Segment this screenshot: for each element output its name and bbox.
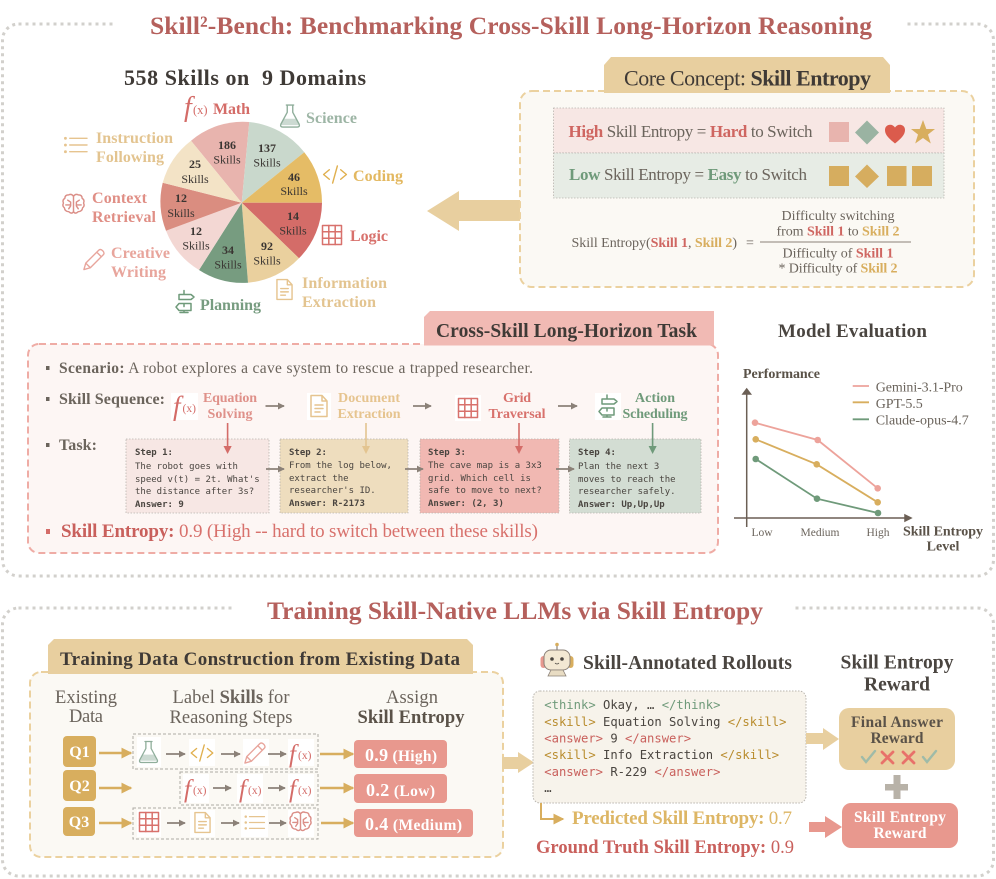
row: Q1 [63, 734, 447, 769]
heading: reward [840, 652, 954, 696]
x axis labels: High [866, 527, 890, 539]
pie chart: 12 [175, 191, 187, 205]
label: instruction following [64, 130, 173, 166]
step 2 [280, 439, 408, 513]
icon: plus [885, 775, 908, 799]
skill: equation solving: Equation [203, 391, 257, 406]
box: final answer reward: Final Answer [851, 714, 943, 731]
skill: action scheduling: Scheduling [622, 407, 688, 422]
legend: Claude-opus-4.7 [876, 414, 969, 428]
scenario: Scenario: A robot explores a cave system to rescue a trapped researcher. [59, 360, 533, 377]
column headings: Data [69, 707, 103, 727]
row: Q3: 0.4 (Medium) [365, 814, 462, 834]
arrow [413, 405, 431, 407]
heading: reward: Skill Entropy [840, 652, 954, 674]
label: instruction following: Following [96, 149, 164, 166]
arrow: rollout to final answer [806, 728, 839, 750]
row: low skill entropy [554, 153, 944, 198]
step 1: Answer: 9 [135, 500, 184, 510]
label: information extraction: Extraction [302, 294, 376, 311]
panel: cross-skill long-horizon task [28, 311, 718, 553]
formula: skill entropy: Difficulty of Skill 1 [782, 246, 894, 262]
legend: Gemini-3.1-Pro [876, 380, 963, 396]
pie chart: 46 [288, 170, 300, 184]
skill: document extraction: Extraction [338, 407, 401, 422]
arrow [558, 405, 577, 407]
box: final answer reward: Reward [870, 730, 924, 747]
step 3: The cave map is a 3x3 [428, 461, 542, 471]
panel: training section border [2, 598, 994, 876]
pie chart: 92 [261, 239, 273, 253]
label: math: Math [213, 101, 250, 118]
label: science: Science [306, 110, 357, 127]
column headings: Label Skills for [172, 688, 290, 708]
skill: action scheduling: Action [635, 391, 675, 406]
step 2: extract the [289, 474, 349, 484]
label: coding: Coding [353, 168, 403, 185]
column headings [55, 688, 465, 728]
label: math [184, 92, 250, 123]
heading: rollouts: Skill-Annotated Rollouts [583, 653, 792, 674]
tab: core concept [604, 57, 890, 93]
formula: skill entropy: * Difficulty of Skill 2 [778, 262, 898, 276]
column headings: Existing [55, 688, 117, 708]
heading: model evaluation: Model Evaluation [778, 321, 927, 342]
label: instruction following: Instruction [96, 130, 173, 147]
arrow: entropy to reward [809, 816, 842, 838]
label: planning: Planning [200, 297, 261, 314]
code block: rollout: … [544, 781, 552, 795]
skill: grid traversal: Grid [503, 391, 531, 406]
step 2: researcher's ID. [289, 486, 376, 496]
label: science [281, 105, 357, 127]
row: Q1: (x) [298, 750, 312, 762]
label: coding [324, 166, 403, 185]
y axis label: Performance [743, 367, 820, 382]
step 2: Step 2: [289, 448, 327, 458]
label: math: (x) [193, 103, 208, 117]
step 4: Step 4: [578, 448, 616, 458]
step 3: grid. Which cell is [428, 474, 531, 484]
row: high skill entropy [554, 108, 944, 153]
step 1: the distance after 3s? [135, 487, 254, 497]
skill entropy score: Skill Entropy: 0.9 (High -- hard to switch between these skills) [61, 521, 538, 542]
legend [853, 380, 969, 428]
tab: training data construction [48, 639, 473, 674]
pie chart: 186 [218, 138, 236, 152]
column headings: Assign [386, 688, 438, 708]
row: Q2: Q2 [69, 778, 90, 795]
ground truth skill entropy: Ground Truth Skill Entropy: 0.9 [536, 838, 794, 858]
row: Q1: 0.9 (High) [365, 745, 437, 765]
step 4: researcher safely. [578, 487, 676, 497]
row: Q2: f [239, 776, 249, 803]
code block: rollout [533, 691, 806, 803]
row: Q2: f [289, 776, 299, 803]
x axis title: Skill Entropy [903, 524, 983, 540]
step 3: Step 3: [428, 448, 466, 458]
skill: document extraction: Document [338, 391, 400, 406]
arrow: concept to skills [427, 191, 522, 231]
step 1: speed v(t) = 2t. What's [135, 475, 260, 485]
formula: skill entropy: Difficulty switching [782, 209, 894, 224]
title: training: Training Skill-Native LLMs via Skill Entropy [267, 596, 763, 625]
label: planning [176, 290, 261, 314]
step 3: safe to move to next? [428, 486, 542, 496]
tab: core concept: Core Concept: Skill Entropy [624, 66, 871, 90]
tab: cross-skill task [424, 311, 714, 346]
formula: skill entropy [572, 209, 911, 276]
row: Q1: f [289, 741, 299, 768]
task label: Task: [59, 437, 97, 454]
title: benchmark: Skill²-Bench: Benchmarking Cross-Skill Long-Horizon Reasoning [150, 11, 872, 40]
step 3 [420, 439, 559, 513]
step 2: From the log below, [289, 461, 392, 471]
row: Q2: (x) [248, 785, 262, 797]
step 1: The robot goes with [135, 462, 238, 472]
label: creative writing [84, 245, 170, 281]
box: final answer reward [839, 708, 955, 770]
label: creative writing: Writing [111, 264, 166, 281]
skill sequence [46, 391, 688, 422]
code block: rollout: <skill> Equation Solving </skill> [544, 715, 786, 729]
tab: cross-skill task: Cross-Skill Long-Horizon Task [436, 321, 697, 342]
x axis labels [751, 527, 890, 539]
panel: core concept skill entropy [520, 57, 974, 287]
row: Q2: (x) [193, 785, 207, 797]
code block: rollout: <think> Okay, … </think> [544, 698, 720, 712]
pie chart: Skills [182, 238, 210, 252]
code block: rollout: <skill> Info Extraction </skill> [544, 748, 779, 762]
pie chart: 14 [287, 209, 299, 223]
row: Q2: 0.2 (Low) [366, 780, 435, 800]
skill: equation solving [171, 391, 257, 422]
line series: claude [752, 456, 881, 516]
pie chart: 12 [190, 224, 202, 238]
arrows: skills to steps [224, 423, 657, 454]
row: low skill entropy: Low Skill Entropy = Easy to Switch [569, 165, 808, 184]
skill: grid traversal [455, 391, 546, 422]
pie chart: 137 [258, 141, 276, 155]
pie chart: Skills [253, 254, 281, 268]
panel: 558 skills on 9 domains [63, 65, 403, 314]
panel: skill entropy reward [806, 652, 958, 848]
column headings: Skill Entropy [358, 708, 465, 728]
row: Q1: Q1 [69, 744, 90, 761]
row: Q2: (x) [298, 785, 312, 797]
tab: training data construction: Training Data Construction from Existing Data [60, 649, 460, 670]
formula: skill entropy: from Skill 1 to Skill 2 [776, 224, 900, 240]
panel: training data construction [30, 639, 503, 857]
x axis labels: Medium [801, 527, 840, 539]
label: math: f [184, 92, 195, 123]
icon: robot [540, 643, 574, 676]
legend: GPT-5.5 [876, 397, 923, 412]
panel: benchmark section border [2, 14, 994, 576]
label: context retrieval [63, 190, 157, 226]
pie chart: 34 [222, 243, 234, 257]
pie chart: 25 [189, 157, 201, 171]
skill: grid traversal: Traversal [488, 407, 546, 422]
row: high skill entropy: High Skill Entropy = Hard to Switch [568, 122, 813, 141]
line series: gpt [752, 436, 881, 506]
pie chart: Skills [279, 224, 307, 238]
x axis title: Level [927, 540, 959, 554]
box: skill entropy reward: Reward [874, 825, 927, 842]
axes [734, 389, 911, 527]
x axis title [903, 524, 983, 554]
skill: action scheduling [595, 391, 688, 422]
row: Q2 [63, 770, 447, 805]
step 2: Answer: R-2173 [289, 499, 365, 509]
pie chart: Skills [213, 152, 241, 166]
label: logic: Logic [350, 228, 388, 245]
pie chart: Skills [167, 206, 195, 220]
heading: reward: Reward [864, 674, 930, 696]
step 3: Answer: (2, 3) [428, 499, 504, 509]
connector: predicted [541, 803, 563, 819]
box: skill entropy reward [842, 803, 958, 848]
arrows: between steps [266, 468, 574, 470]
pie chart: Skills [280, 184, 308, 198]
skill: document extraction [307, 391, 401, 422]
panel: skill-annotated rollouts [533, 643, 806, 858]
arrow: data to rollouts [502, 752, 534, 773]
step 1: Step 1: [135, 448, 173, 458]
predicted skill entropy: Predicted Skill Entropy: 0.7 [572, 808, 792, 829]
code block: rollout: <answer> 9 </answer> [544, 732, 691, 746]
skill: equation solving: Solving [208, 407, 252, 422]
pie chart: Skills [181, 172, 209, 186]
label: context retrieval: Retrieval [92, 209, 157, 226]
formula: skill entropy: Skill Entropy(Skill 1, Skill 2) [572, 236, 737, 251]
label: information extraction: Information [302, 275, 387, 292]
row: Q3: Q3 [69, 814, 89, 831]
row: Q3 [63, 807, 473, 839]
step 1 [126, 439, 269, 513]
pie chart: Skills [214, 258, 242, 272]
pie chart [160, 122, 322, 283]
label: information extraction [277, 275, 387, 311]
label: logic [322, 226, 388, 245]
label: context retrieval: Context [92, 190, 148, 207]
label: creative writing: Creative [111, 245, 170, 262]
formula: skill entropy: = [746, 236, 754, 251]
code block: rollout: <answer> R-229 </answer> [544, 765, 720, 779]
row: Q2: f [184, 776, 194, 803]
skill: equation solving: (x) [182, 403, 196, 415]
step 4: Plan the next 3 [578, 462, 659, 472]
skill: equation solving: f [173, 391, 184, 421]
arrow [266, 405, 284, 407]
step 4 [570, 439, 701, 513]
panel: model evaluation chart [734, 321, 983, 554]
line series: gemini [752, 419, 881, 492]
pie chart: Skills [253, 156, 281, 170]
column headings: Reasoning Steps [170, 708, 292, 728]
step 4: Answer: Up,Up,Up [578, 500, 665, 510]
x axis labels: Low [751, 527, 773, 539]
box: skill entropy reward: Skill Entropy [854, 809, 946, 826]
step 4: moves to reach the [578, 475, 676, 485]
skill sequence: Skill Sequence: [59, 391, 165, 408]
heading: skills: 558 Skills on 9 Domains [124, 65, 366, 90]
